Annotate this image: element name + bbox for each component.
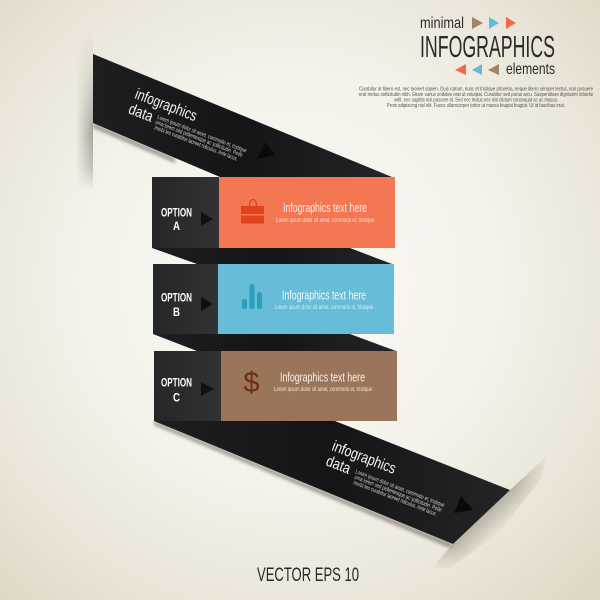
icon: option B arrow bbox=[201, 297, 213, 311]
lower band heading: infographics data bbox=[324, 438, 398, 478]
option C heading: Infographics text here bbox=[280, 370, 365, 384]
lower band heading: infographics data: infographics bbox=[330, 438, 398, 478]
top diagonal band bbox=[93, 54, 392, 177]
option C label: OPTION bbox=[161, 376, 192, 390]
intro paragraph: Proin adipiscing nisl elit. Fusce ullamcorper tortor ut massa feugiat feugiat. Ut id faucibus erat. bbox=[387, 103, 565, 109]
fold shadow: left bbox=[78, 48, 93, 186]
lower diagonal band bbox=[154, 421, 510, 544]
option B label: B bbox=[173, 305, 180, 319]
icon: triangles pointing right bbox=[472, 17, 516, 29]
icon: bar chart bbox=[242, 284, 262, 309]
lower band body text bbox=[352, 469, 445, 518]
band shadows bbox=[93, 123, 453, 548]
icon: lower band triangle bbox=[454, 496, 473, 513]
band body text: urna lorem sed pellentesque ac sollicitudin. Pede bbox=[154, 120, 243, 159]
panel: option C bbox=[154, 351, 510, 544]
option A tab bbox=[152, 177, 219, 248]
option C description: Lorem ipsum dolor sit amet, commodo et, tristique bbox=[274, 387, 372, 393]
option B heading: Infographics text here bbox=[282, 288, 366, 302]
lower band body text: Lorem ipsum dolor sit amet, commodo et, tristique bbox=[354, 469, 445, 509]
icon: dollar sign: $ bbox=[243, 367, 260, 399]
option B label bbox=[161, 290, 192, 319]
connector band A to B bbox=[152, 248, 392, 264]
option A label: OPTION bbox=[161, 206, 192, 220]
option A label: A bbox=[173, 219, 180, 233]
icon: option C arrow bbox=[201, 382, 214, 396]
icon: triangles pointing left bbox=[455, 64, 499, 75]
option C colour panel bbox=[221, 351, 397, 421]
title: minimal: minimal bbox=[420, 15, 464, 32]
option B label: OPTION bbox=[161, 290, 192, 304]
title: elements: elements bbox=[506, 61, 555, 78]
connector band B to C bbox=[153, 334, 396, 351]
panel: option B bbox=[153, 264, 394, 334]
option A heading: Infographics text here bbox=[283, 200, 367, 215]
option C label: C bbox=[173, 390, 180, 404]
band heading: infographics data bbox=[126, 86, 200, 126]
icon: option A arrow bbox=[201, 212, 213, 226]
option C label bbox=[161, 376, 192, 404]
icon: briefcase bbox=[241, 200, 264, 224]
intro paragraph: velit, nec sagittis nisl posuere id. Sed nec lectus nec nisl dictum consequat ac ac massa. bbox=[394, 98, 558, 104]
intro paragraph bbox=[359, 86, 593, 109]
option A colour panel bbox=[219, 177, 395, 248]
title block bbox=[420, 15, 555, 78]
option A description: Lorem ipsum dolor sit amet, commodo et, tristique bbox=[276, 218, 374, 224]
fold shadow: bottom right bbox=[432, 455, 548, 568]
band body text bbox=[153, 115, 247, 163]
lower band body text: urna lorem sed pellentesque ac sollicitudin. Pede bbox=[353, 475, 442, 514]
lower band text and arrow bbox=[324, 438, 473, 518]
icon: band triangle bbox=[257, 142, 275, 159]
option B colour panel bbox=[218, 264, 394, 334]
option B tab bbox=[153, 264, 218, 334]
lower band body text: morbi leo curabitur laoreet ridiculus. Ante lacus. bbox=[352, 480, 438, 518]
band body text: morbi leo curabitur laoreet ridiculus. Ante lacus. bbox=[153, 125, 239, 163]
lower band heading: infographics data: data bbox=[324, 453, 353, 478]
option C tab bbox=[154, 351, 221, 421]
band body text: Lorem ipsum dolor sit amet, commodo et, tristique bbox=[156, 115, 247, 154]
band heading: infographics data: infographics bbox=[133, 86, 200, 125]
option B description: Lorem ipsum dolor sit amet, commodo et, tristique bbox=[275, 305, 373, 311]
footer: vector eps 10: VECTOR EPS 10 bbox=[257, 565, 359, 586]
band heading: infographics data: data bbox=[126, 101, 156, 126]
panel: option A bbox=[152, 177, 395, 248]
option A label bbox=[161, 206, 192, 233]
